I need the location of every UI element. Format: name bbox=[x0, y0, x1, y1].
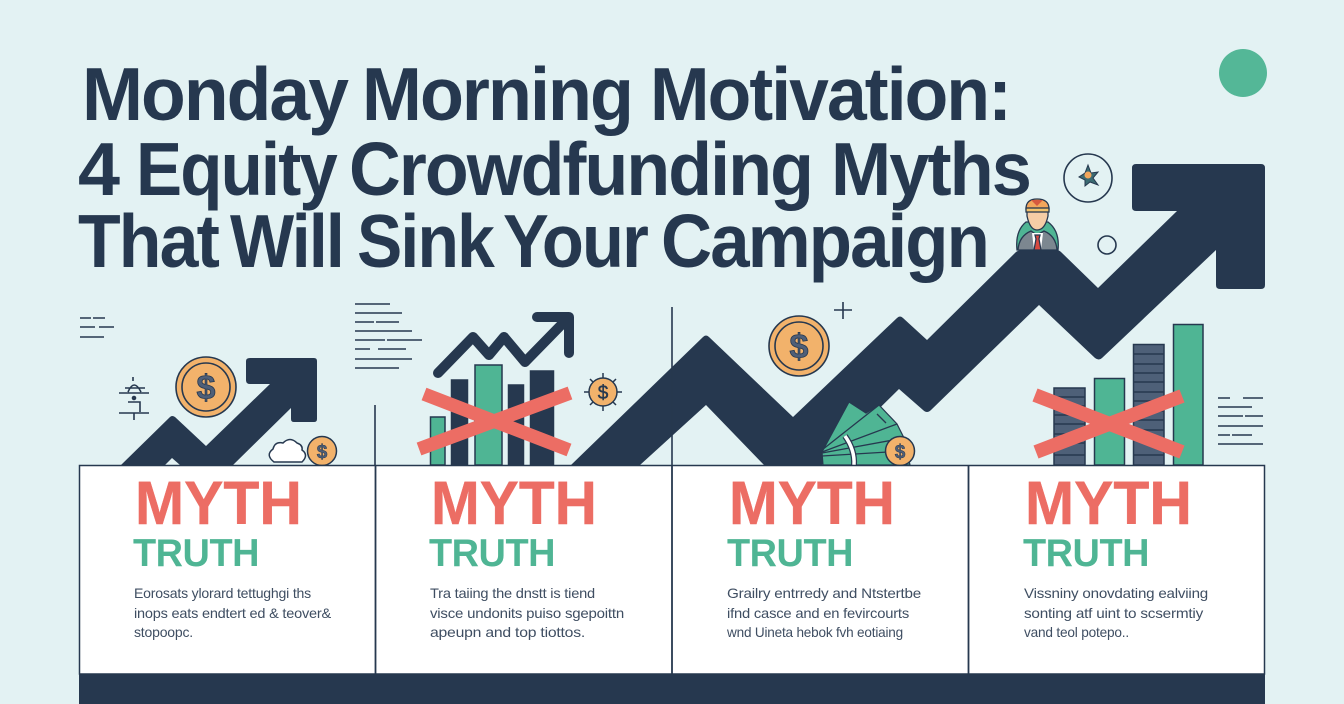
figure: person on arrow peak bbox=[1017, 199, 1058, 250]
card 3 text bbox=[726, 469, 921, 640]
title: Campaign bbox=[661, 199, 988, 283]
sparkline arrow bbox=[438, 317, 569, 373]
icon: fan of banknotes bbox=[822, 402, 914, 466]
title: 4 bbox=[78, 127, 120, 211]
bottom dark band bbox=[79, 674, 1265, 704]
title: Motivation: bbox=[650, 52, 1010, 136]
card 3 text: TRUTH bbox=[727, 532, 853, 575]
card 4 text: TRUTH bbox=[1023, 532, 1149, 575]
icon: star in circle bbox=[1064, 154, 1112, 202]
icon: sun dollar coin bbox=[584, 373, 622, 411]
icon: cloud bbox=[269, 440, 306, 462]
divider lines above cards bbox=[375, 307, 672, 465]
title: Will bbox=[230, 199, 343, 283]
card 1 text: inops eats endtert ed & teover& bbox=[134, 605, 332, 621]
card 3 text: Grailry entrredy and Ntstertbe bbox=[727, 585, 921, 601]
icon: dollar coin centre bbox=[769, 316, 829, 376]
icon: dollar coin large: $ bbox=[197, 369, 216, 407]
card 4 text: MYTH bbox=[1025, 469, 1192, 537]
card 2 text bbox=[429, 469, 624, 640]
icon: dollar coin small bbox=[308, 436, 336, 466]
card 1 text bbox=[133, 469, 332, 640]
card 4 text: Vissniny onovdating ealviing bbox=[1024, 585, 1208, 601]
title: Sink bbox=[357, 199, 495, 283]
icon: dollar coin centre: $ bbox=[790, 328, 809, 366]
decorative text lines: second column bbox=[355, 304, 422, 368]
card 2 text: visce undonits puiso sgepoittn bbox=[430, 605, 624, 621]
icon: balance glyph bbox=[119, 377, 149, 420]
card 1 text: Eorosats ylorard tettughgi ths bbox=[134, 585, 311, 601]
title: Monday bbox=[82, 52, 349, 136]
icon: small ring bbox=[1098, 236, 1116, 254]
title: That bbox=[78, 199, 220, 283]
title: Myths bbox=[831, 127, 1030, 211]
title: Your bbox=[503, 199, 649, 283]
decorative text lines: far left bbox=[80, 318, 114, 337]
card 3 text: ifnd casce and en fevircourts bbox=[727, 605, 909, 621]
bar chart with cross: fourth column bbox=[1035, 324, 1203, 465]
card 3 text: MYTH bbox=[729, 469, 895, 537]
small rising arrow bbox=[121, 358, 317, 465]
icon: dollar coin small: $ bbox=[317, 442, 328, 463]
card 4 text bbox=[1023, 469, 1208, 640]
card 1 text: MYTH bbox=[135, 469, 302, 537]
decorative text lines: far right bbox=[1218, 398, 1263, 444]
icon: sun dollar coin: $ bbox=[598, 383, 609, 404]
large rising arrow bbox=[571, 164, 1265, 465]
icon: plus bbox=[834, 302, 852, 319]
card 3 text: wnd Uineta hebok fvh eotiaing bbox=[726, 624, 903, 640]
card 2 text: apeupn and top tiottos. bbox=[430, 624, 585, 640]
title bbox=[78, 52, 1030, 283]
title: Equity bbox=[136, 127, 338, 211]
card 4 text: vand teol potepo.. bbox=[1024, 624, 1129, 640]
card 1 text: stopoopc. bbox=[134, 624, 193, 640]
bar chart with cross: second column bbox=[419, 365, 570, 465]
card 2 text: Tra taiing the dnstt is tiend bbox=[430, 585, 595, 601]
icon: green circle bbox=[1219, 49, 1267, 97]
card 4 text: sonting atf uint to scsermtiy bbox=[1024, 605, 1203, 621]
title: Morning bbox=[362, 52, 632, 136]
card 2 text: MYTH bbox=[431, 469, 597, 537]
card 2 text: TRUTH bbox=[429, 532, 555, 575]
icon: fan of banknotes: $ bbox=[895, 442, 906, 463]
card 1 text: TRUTH bbox=[133, 532, 259, 575]
icon: dollar coin large bbox=[176, 357, 236, 417]
title: Crowdfunding bbox=[349, 127, 812, 211]
panel: myth cards bbox=[80, 465, 1264, 674]
